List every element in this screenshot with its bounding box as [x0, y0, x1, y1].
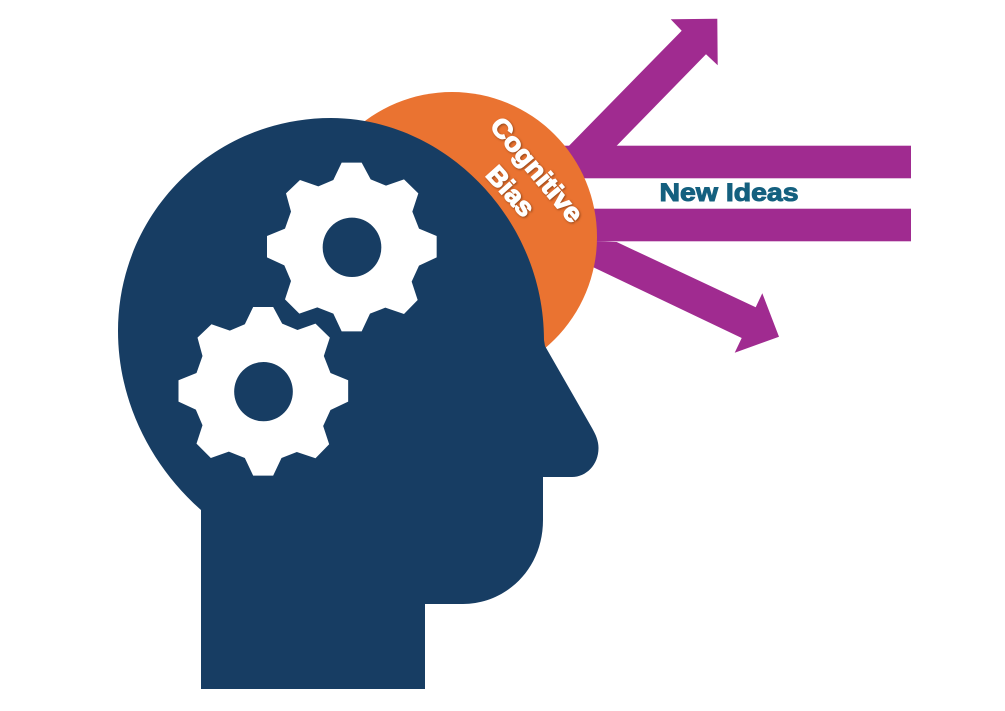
head silhouette [118, 118, 598, 689]
arrow: new idea deflected downward [570, 240, 779, 353]
arrow: new idea deflected upward [560, 19, 718, 170]
icon: lower gear [178, 307, 348, 476]
label: New Ideas: New Ideas [660, 179, 798, 207]
bar: new idea lower incoming [560, 209, 911, 241]
bar: new idea upper incoming [560, 146, 911, 178]
orange circle: cognitive bias barrier [307, 92, 597, 382]
label: Cognitive Bias, rotated along the head: Bias [480, 159, 541, 223]
icon: upper gear [267, 163, 437, 331]
label: Cognitive Bias, rotated along the head: Cognitive [484, 111, 590, 228]
